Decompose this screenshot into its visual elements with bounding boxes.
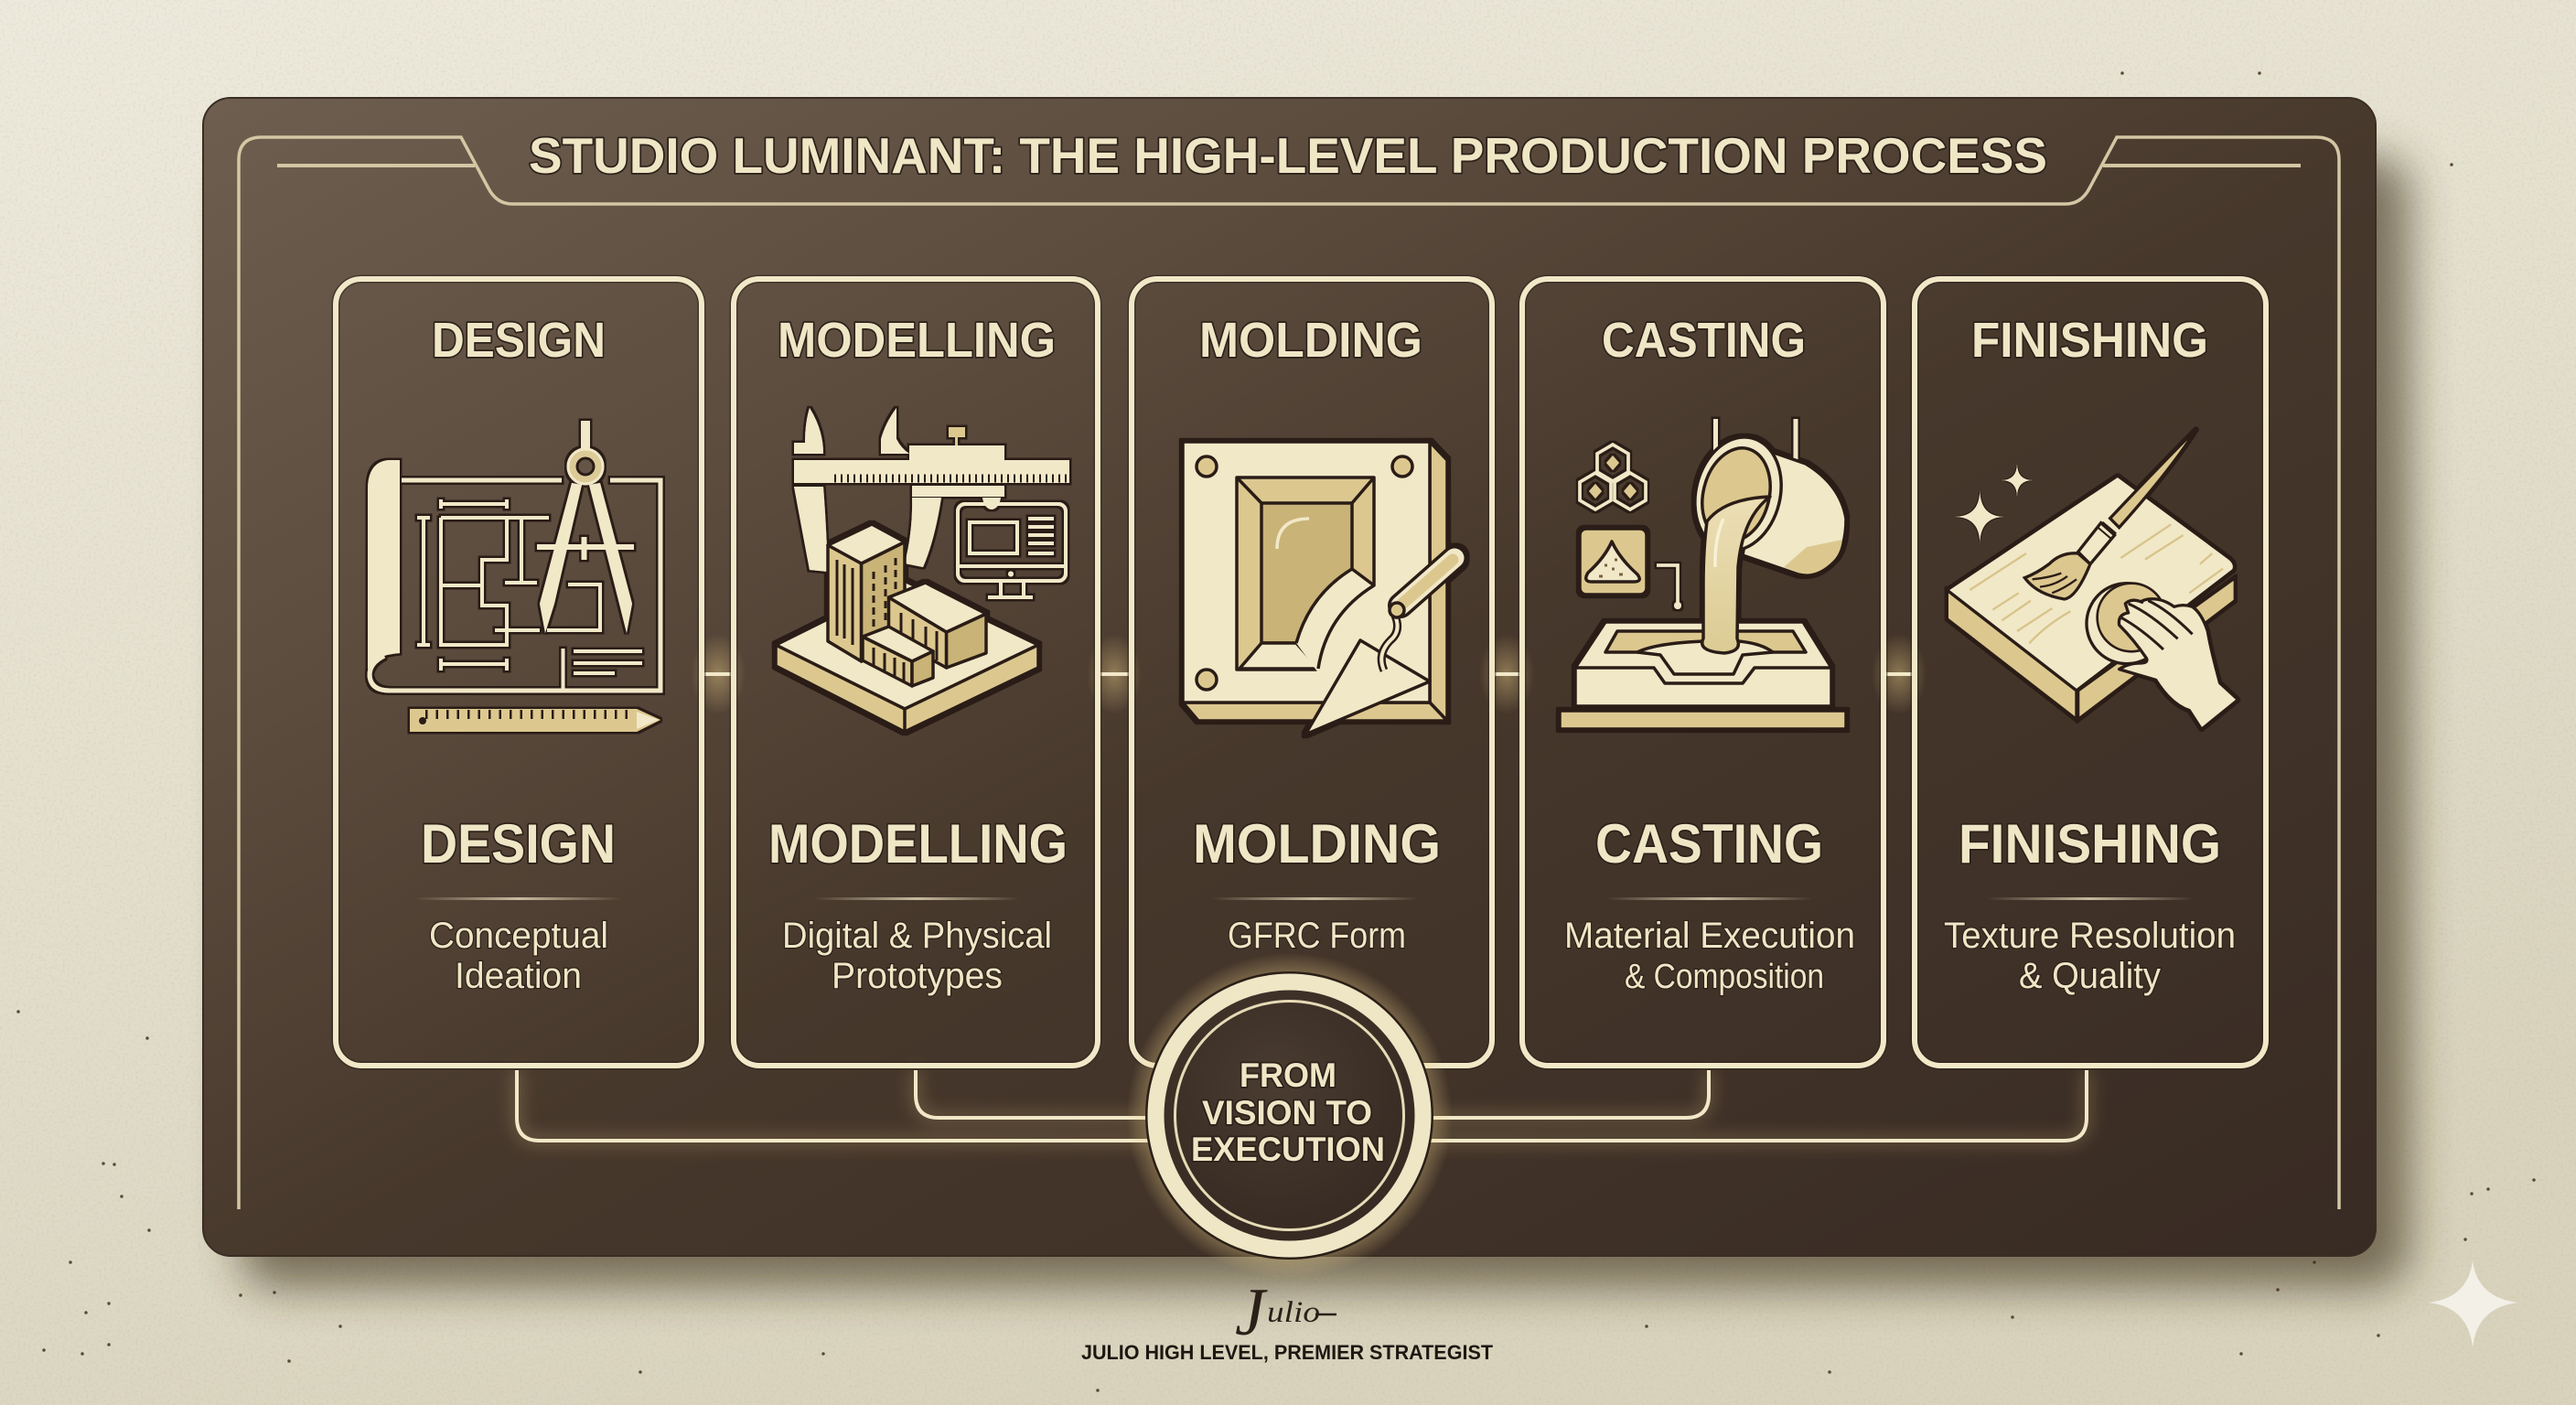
- badge text: EXECUTION: [1191, 1131, 1385, 1168]
- heading: casting: CASTING: [1602, 313, 1806, 368]
- header frame: [239, 137, 2339, 1209]
- heading: modelling: MODELLING: [778, 313, 1056, 368]
- icon: mold and trowel: [1183, 442, 1454, 735]
- divider and label: modelling: Prototypes: [832, 956, 1003, 996]
- icon: board, brush and polishing hand: [1947, 428, 2238, 729]
- divider and label: casting: [1564, 813, 1855, 996]
- badge text: FROM: [1240, 1056, 1336, 1094]
- signature: ulio: [1267, 1296, 1320, 1329]
- central badge: [1127, 953, 1453, 1279]
- divider and label: finishing: & Quality: [2019, 956, 2161, 996]
- divider and label: design: Ideation: [455, 956, 582, 996]
- footer credit: JULIO HIGH LEVEL, PREMIER STRATEGIST: [1081, 1341, 1494, 1364]
- panel: design: [336, 279, 702, 1066]
- panel: casting: [1522, 279, 1884, 1066]
- divider and label: casting: Material Execution: [1564, 916, 1855, 956]
- icon: blueprint, compass and ruler: [368, 421, 660, 732]
- icon: caliper, building model and monitor: [776, 408, 1069, 732]
- divider and label: design: DESIGN: [421, 813, 616, 874]
- divider and label: modelling: MODELLING: [768, 813, 1068, 874]
- connectors between cards: [691, 634, 1927, 714]
- title: STUDIO LUMINANT: THE HIGH-LEVEL PRODUCTION PROCESS: [529, 127, 2047, 184]
- panel: main dark board: [203, 98, 2410, 1288]
- divider and label: casting: CASTING: [1595, 813, 1823, 874]
- badge text: VISION TO: [1202, 1094, 1372, 1132]
- divider and label: molding: GFRC Form: [1228, 916, 1406, 956]
- connectors to central badge: [517, 1070, 2087, 1141]
- icon: pouring pot, materials and tray: [1560, 419, 1846, 729]
- divider and label: casting: & Composition: [1625, 958, 1824, 996]
- icon: corner sparkle: [2429, 1260, 2518, 1347]
- signature: J: [1235, 1275, 1268, 1350]
- divider and label: molding: MOLDING: [1193, 813, 1441, 874]
- panel: molding: [1132, 279, 1492, 1066]
- badge text: [1191, 1056, 1385, 1168]
- divider and label: modelling: Digital & Physical: [782, 916, 1052, 956]
- signature: [1235, 1275, 1336, 1350]
- divider and label: design: [415, 813, 621, 996]
- panel: modelling: [734, 279, 1098, 1066]
- heading: finishing: FINISHING: [1971, 313, 2208, 368]
- divider and label: finishing: Texture Resolution: [1944, 916, 2236, 956]
- panel: finishing: [1915, 279, 2266, 1066]
- heading: molding: MOLDING: [1199, 313, 1422, 368]
- divider and label: finishing: FINISHING: [1959, 813, 2221, 874]
- heading: design: DESIGN: [432, 313, 606, 368]
- divider and label: design: Conceptual: [429, 916, 608, 956]
- divider and label: modelling: [768, 813, 1068, 996]
- divider and label: molding: [1193, 813, 1441, 956]
- divider and label: finishing: [1944, 813, 2236, 996]
